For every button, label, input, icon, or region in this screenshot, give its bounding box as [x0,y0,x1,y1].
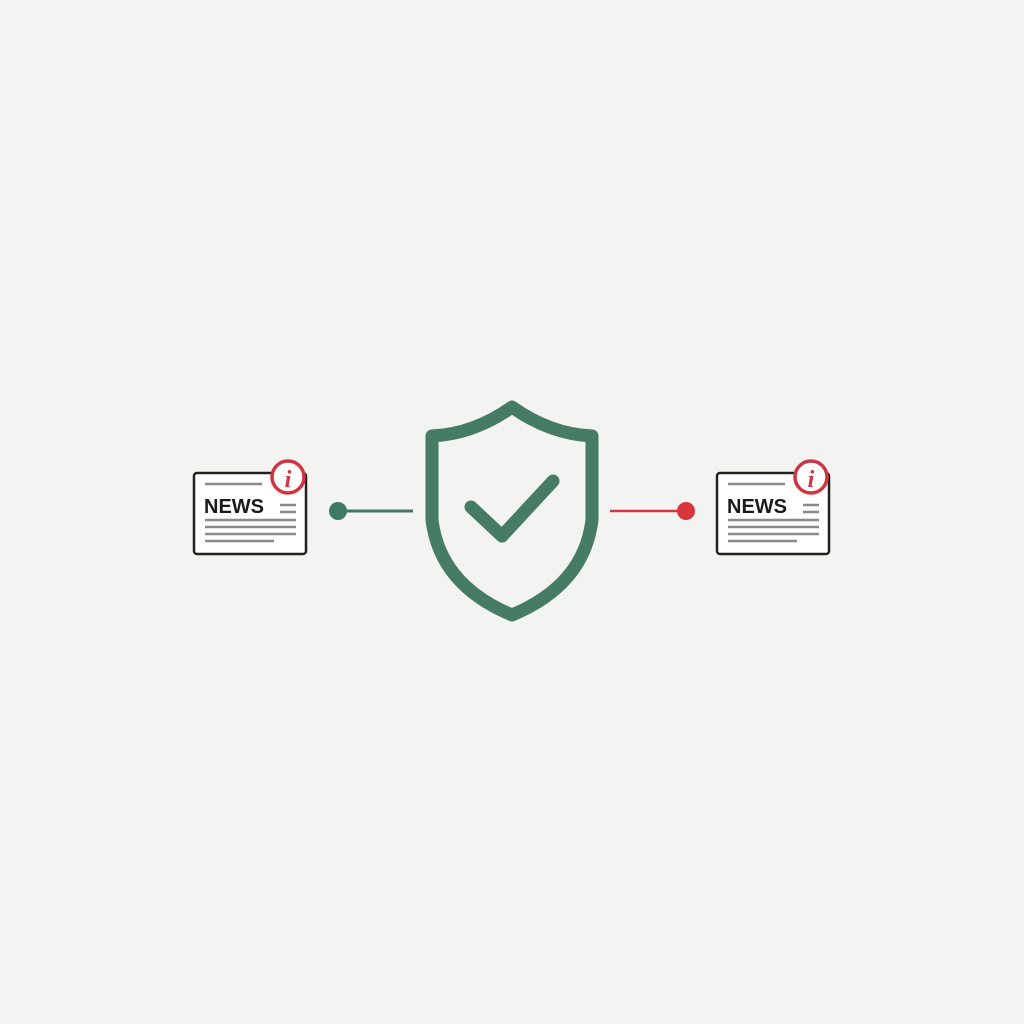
icon: left news: NEWS [204,496,264,518]
icon: shield with check [432,407,592,615]
arrow: red connector [610,502,695,520]
icon: right news: NEWS [727,496,787,518]
arrow: green connector [329,502,413,520]
icon: right info badge: i [808,467,815,493]
icon: right news [717,461,829,554]
icon: left news [194,461,306,554]
icon: left info badge: i [285,467,292,493]
